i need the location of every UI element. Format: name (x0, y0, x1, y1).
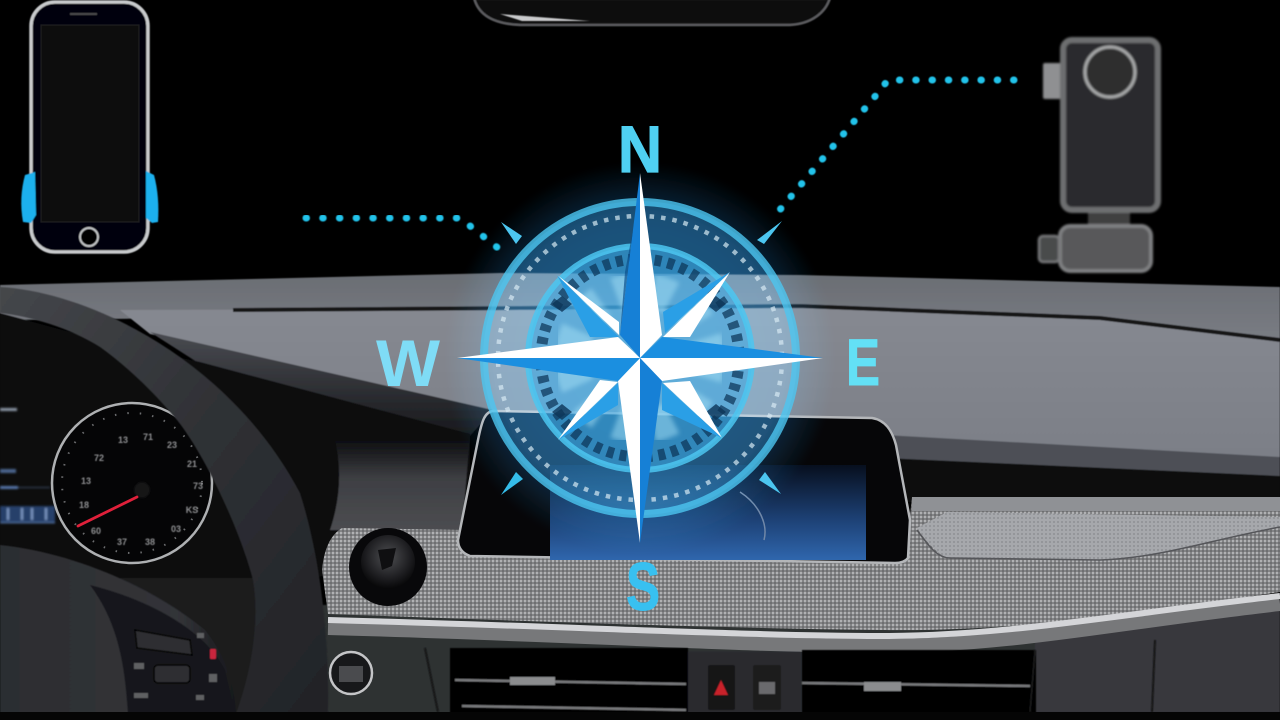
centre screen (458, 411, 910, 563)
right vent (802, 650, 1036, 714)
gauge numbers: 71 (143, 432, 153, 442)
gauge numbers: 23 (167, 440, 177, 450)
gauge numbers: 73 (193, 481, 203, 491)
gauge numbers: 03 (171, 524, 181, 534)
camera mount knob (1039, 236, 1059, 262)
trim top smooth band (912, 497, 1280, 511)
gauge numbers: 37 (117, 537, 127, 547)
camera body (1063, 40, 1158, 210)
silver trim shadow (328, 604, 1280, 646)
dotted line: phone (177, 112, 340, 120)
control button lower (154, 665, 190, 683)
letter S: S (626, 549, 660, 625)
gauge numbers: 60 (91, 526, 101, 536)
bottom black band (0, 712, 1280, 720)
red control light (210, 649, 216, 659)
hood underside (150, 332, 493, 436)
gauge numbers (79, 432, 203, 547)
tick: south-west (501, 472, 523, 495)
silver trim line (328, 596, 1280, 636)
compass band tint (483, 201, 797, 515)
tick: south-east (759, 472, 781, 494)
gauge numbers: KS (186, 505, 198, 515)
letter E: E (846, 325, 880, 399)
left vent tab (510, 677, 555, 685)
dotted line: camera connector (778, 80, 1014, 212)
letter W: W (376, 326, 441, 400)
right lower fill (1035, 600, 1280, 712)
gauge numbers: 72 (94, 453, 104, 463)
phone speaker (70, 13, 97, 15)
gauge numbers: 18 (79, 500, 89, 510)
trim centre bar (322, 497, 1280, 630)
gauge numbers: 13 (118, 435, 128, 445)
tick: north-east (757, 221, 782, 244)
right vent slats (802, 683, 1030, 686)
screen arc (740, 492, 765, 540)
hazard button (708, 665, 735, 710)
inner pattern ring (572, 290, 708, 426)
rear-view mirror (474, 0, 830, 25)
wheel hub (0, 545, 236, 714)
screen display (550, 465, 866, 560)
inner disc (528, 246, 752, 470)
screen bezel (458, 411, 910, 563)
lower dash fill (236, 605, 1280, 715)
compass glow (445, 163, 835, 553)
button housing (688, 652, 801, 714)
right panel underside (885, 435, 1280, 478)
left vent (450, 648, 688, 714)
letter N: N (618, 112, 662, 186)
left info display (0, 408, 55, 524)
dotted line: left connector (306, 218, 498, 248)
right vent tab (864, 682, 901, 691)
camera neck (1088, 208, 1130, 228)
speedometer (52, 403, 212, 563)
wheel spoke controls (90, 585, 235, 714)
phone home button (80, 228, 98, 246)
dark N-S shading on star (620, 230, 633, 335)
outer ring (484, 202, 796, 514)
steering wheel (0, 287, 328, 718)
right clip (146, 171, 158, 223)
left clip (21, 172, 36, 223)
dashboard top strip (0, 273, 1280, 345)
wheel rim (0, 287, 328, 714)
trim crease line (917, 527, 1280, 560)
start button (330, 652, 372, 694)
gauge numbers: 21 (187, 459, 197, 469)
dashboard crease (233, 306, 1280, 340)
inner tick ring (541, 259, 739, 457)
under-pod bar (120, 578, 260, 718)
dashboard (0, 273, 1280, 715)
control button upper (135, 630, 192, 655)
left vent slats (455, 680, 686, 710)
gauge numbers: 38 (145, 537, 155, 547)
camera side connector (1043, 63, 1061, 99)
textured trim (322, 497, 1280, 646)
gauge numbers: 13 (81, 476, 91, 486)
dark band under panel (885, 458, 1280, 502)
rotary knob (349, 528, 427, 606)
compass (376, 112, 880, 625)
camera lens (1085, 47, 1135, 97)
phone body (31, 2, 148, 252)
trim light panel (917, 512, 1280, 560)
star: diagonal points (557, 272, 730, 440)
gauge needle (78, 497, 137, 526)
gauge tick dots (62, 413, 202, 553)
inner diamonds (552, 296, 726, 420)
phone in holder (21, 2, 158, 252)
centre stack patch (330, 436, 470, 530)
phone screen (41, 25, 139, 222)
air vents and buttons (425, 640, 1155, 714)
dashboard upper panel (120, 307, 1280, 460)
outer dotted ring (498, 216, 782, 500)
gauge hub (134, 482, 150, 498)
dash camera (1039, 40, 1158, 271)
second button (753, 665, 781, 710)
gauge dial (52, 403, 212, 563)
star: cardinal points (457, 173, 823, 543)
vent side panel divider (425, 640, 1155, 712)
binnacle cave (0, 313, 470, 610)
tick: north-west (501, 222, 522, 244)
control labels (134, 633, 217, 700)
camera mount (1060, 226, 1151, 271)
